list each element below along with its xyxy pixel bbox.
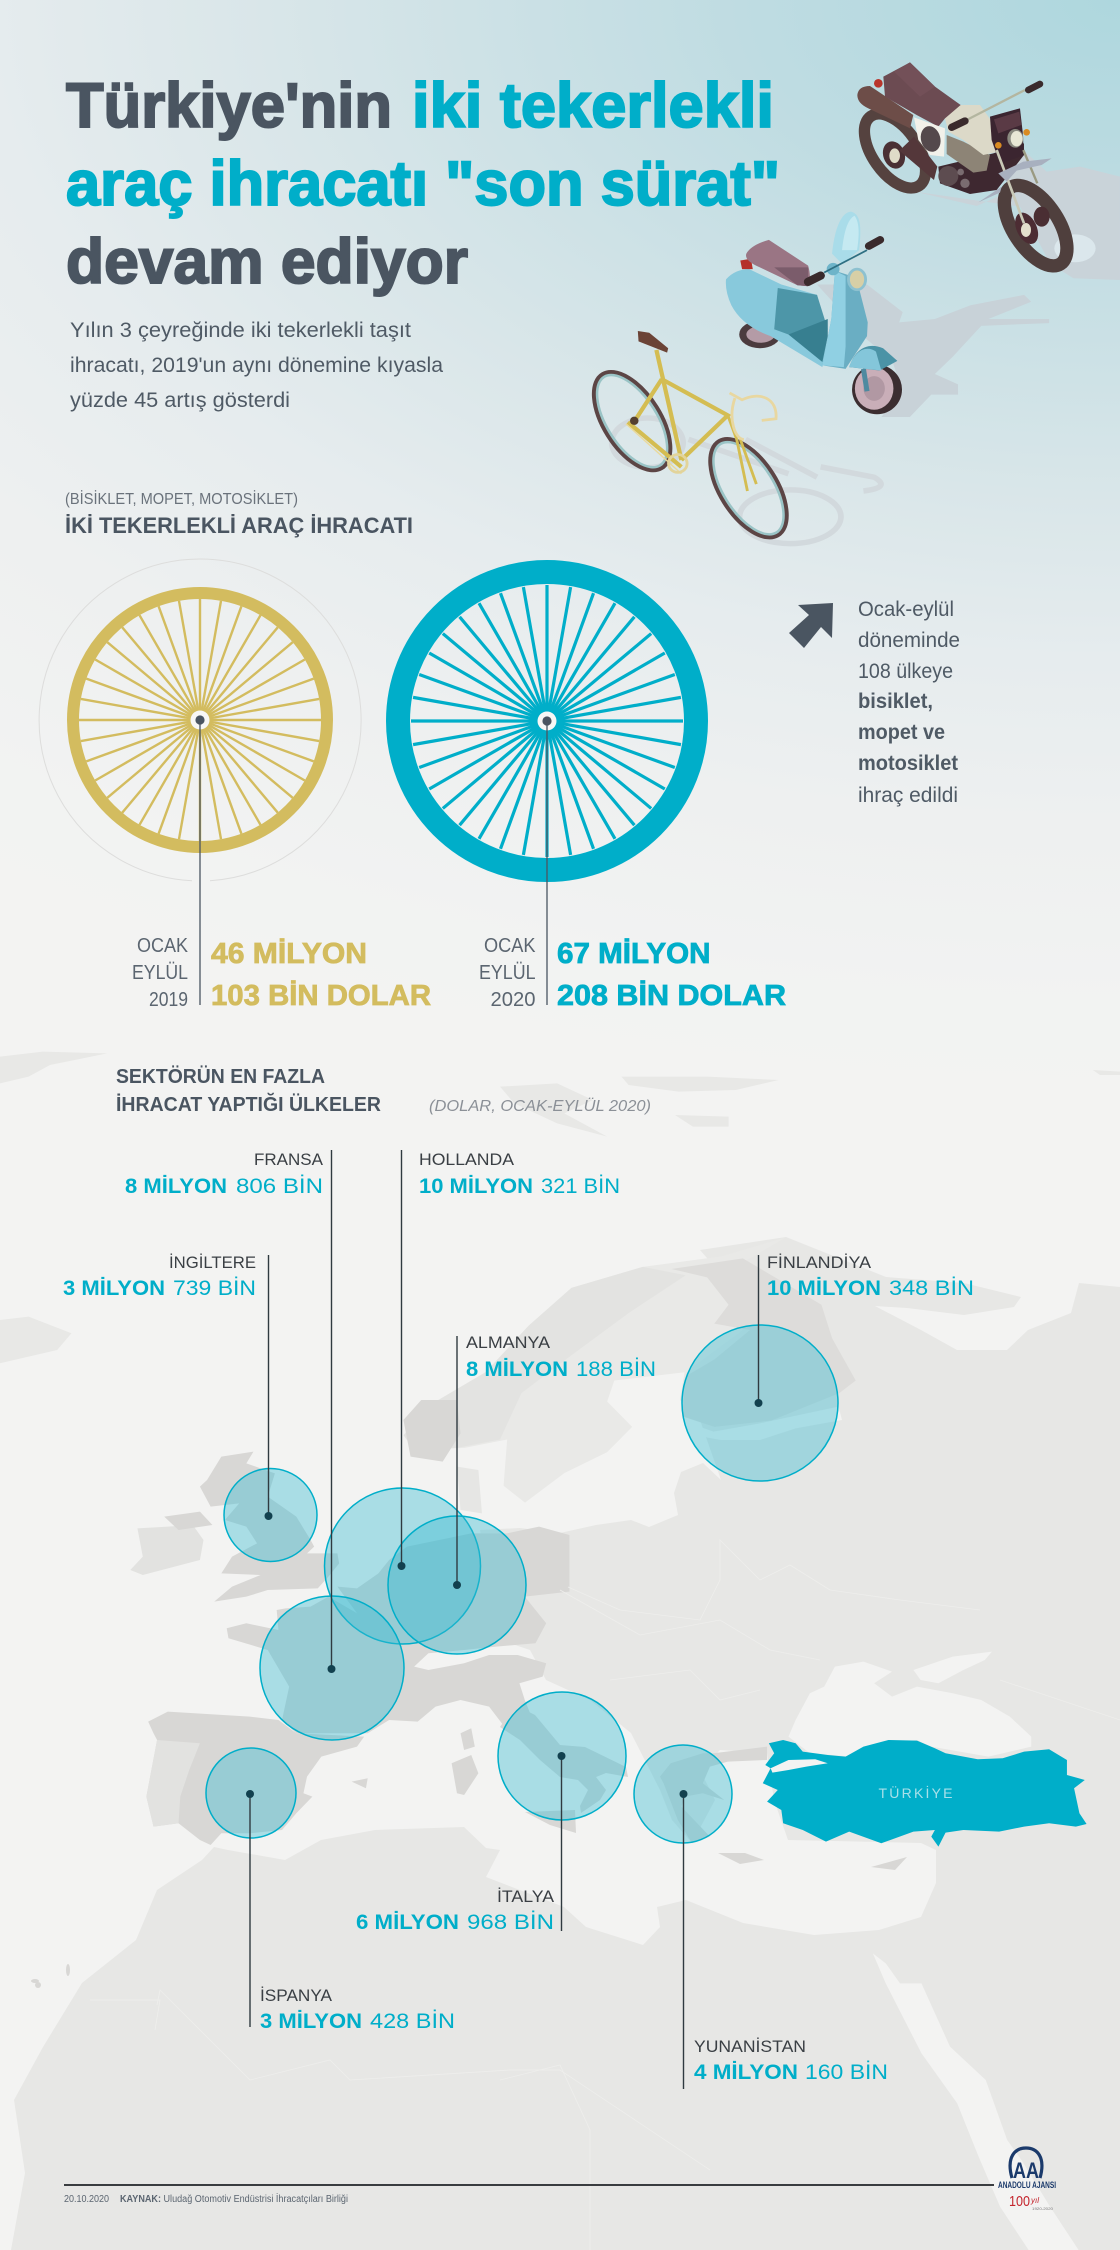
label: Finland [767,1253,974,1300]
heading: top export countries: İHRACAT YAPTIĞI ÜLKELER [116,1092,382,1116]
bicycle shadow [612,418,881,544]
label: Finland: FİNLANDİYA [767,1253,872,1272]
callout: 108 countries: mopet ve [858,721,945,744]
label: Italy: 968 BİN [467,1911,554,1934]
label: 2019 period: 2019 [149,989,188,1011]
logo: Anadolu Ajansı: AA [1013,2158,1039,2183]
label: Germany: 8 MİLYON [466,1358,568,1381]
source line: 20.10.2020 [64,2194,109,2205]
label: 2020 period: EYLÜL [479,962,536,984]
bicycle [578,331,802,550]
callout: 108 countries: Ocak-eylül [858,598,954,621]
label: 2019 period [132,935,189,1011]
callout: 108 countries: motosiklet [858,752,958,775]
section heading: export: İKİ TEKERLEKLİ ARAÇ İHRACATI [65,513,413,538]
label: Italy: 6 MİLYON [356,1911,459,1934]
label: Germany: ALMANYA [466,1333,551,1352]
country circles [206,1325,838,1843]
label: Netherlands [419,1150,620,1198]
section heading: export: (BİSİKLET, MOPET, MOTOSİKLET) [65,489,298,508]
scooter [726,212,902,414]
value: 2020: 208 BİN DOLAR [557,980,786,1012]
label: Spain: İSPANYA [260,1986,333,2005]
label: United Kingdom: 3 MİLYON [63,1277,165,1300]
callout: 108 countries [858,598,960,807]
value: 2019 [211,938,431,1012]
callout: 108 countries: 108 ülkeye [858,660,953,683]
subtitle: Yılın 3 çeyreğinde iki tekerlekli taşıt [70,319,411,342]
value: 2020 [557,938,786,1012]
land: Italy [500,1705,628,1813]
label: Netherlands: 321 BİN [541,1175,620,1198]
land: dark western Europe [130,1400,569,1845]
land: Arctic islands and Iceland [0,1052,1120,1363]
callout: 108 countries: ihraç edildi [858,784,958,807]
note: unit and period: (DOLAR, OCAK-EYLÜL 2020) [429,1097,651,1115]
label: France: 8 MİLYON [125,1175,227,1198]
label: Spain: 428 BİN [370,2010,455,2033]
label: Spain: 3 MİLYON [260,2010,362,2033]
label: United Kingdom: 739 BİN [173,1277,256,1300]
land: Corsica, Sardinia, Balearic islands [461,1728,475,1750]
label: Netherlands: 10 MİLYON [419,1175,533,1198]
label: 2020 period [479,935,536,1011]
label: Italy: İTALYA [497,1887,555,1906]
label: France [125,1150,324,1198]
land: Spain [146,1712,364,1845]
motorcycle [852,62,1120,280]
label: France: FRANSA [254,1150,324,1169]
land: Britain [200,1452,339,1602]
label: 2020 period: 2020 [490,989,536,1011]
section heading: export [65,489,413,538]
sea: Black Sea, Azov and Gulf of Finland [685,1407,1031,1757]
subtitle: yüzde 45 artış gösterdi [70,389,290,412]
title: iki tekerlekli [412,71,774,141]
land: Crete and Cyprus [31,1853,907,1988]
land: borders [90,1540,1120,2250]
logo: Anadolu Ajansı: 100 [1009,2193,1030,2210]
subtitle [70,319,443,412]
title: araç ihracatı "son sürat" [66,149,780,219]
heading: top export countries [116,1065,382,1116]
callout: 108 countries: bisiklet, [858,690,933,713]
label: Finland: 10 MİLYON [767,1277,881,1300]
heading: top export countries: SEKTÖRÜN EN FAZLA [116,1065,325,1088]
label: Germany: 188 BİN [576,1358,656,1381]
title [66,71,780,297]
label: Netherlands: HOLLANDA [419,1150,515,1169]
title: Türkiye'nin [66,71,392,141]
logo: Anadolu Ajansı [998,2148,1056,2211]
label: Finland: 348 BİN [889,1277,974,1300]
footer rule [64,2184,994,2186]
label: Greece [694,2037,888,2084]
label: United Kingdom: İNGİLTERE [169,1253,256,1272]
subtitle: ihracatı, 2019'un aynı dönemine kıyasla [70,354,443,377]
source line [64,2192,348,2205]
chart: 2019 wheel [39,559,361,1005]
label: Greece: 160 BİN [805,2061,888,2084]
label: Spain [260,1986,455,2033]
map of Europe and surroundings [0,1052,1120,2250]
vehicle shadows [817,285,1049,417]
value: 2020: 67 MİLYON [557,938,710,970]
land: Greece and Thrace [660,1747,767,1843]
leader lines and dots [246,1150,762,2089]
land: Germany and Benelux [337,1527,569,1667]
callout: 108 countries: döneminde [858,629,960,652]
logo: Anadolu Ajansı: ANADOLU AJANSI [998,2180,1056,2191]
map: Turkey: TÜRKİYE [878,1784,952,1801]
land: Scandinavia [404,1237,856,1503]
map: Turkey [763,1740,1087,1847]
label: 2020 period: OCAK [484,935,536,957]
label: 2019 period: OCAK [137,935,189,957]
label: Italy [356,1887,555,1934]
logo: Anadolu Ajansı: 1920-2020 [1032,2206,1054,2211]
land: Eurasia and Africa [11,1237,1120,2250]
label: Greece: 4 MİLYON [694,2061,798,2084]
logo: Anadolu Ajansı: yıl [1030,2196,1039,2205]
label: Germany [466,1333,656,1381]
land: France and northern Italy [227,1597,546,1733]
source line: KAYNAK: Uludağ Otomotiv Endüstrisi İhracatçıları Birliği [120,2192,348,2205]
title: devam ediyor [66,227,468,297]
sea: Red Sea [873,1953,1079,2250]
icon: bicycle, scooter and motorcycle [578,62,1120,550]
value: 2019: 103 BİN DOLAR [211,980,431,1012]
label: 2019 period: EYLÜL [132,962,188,984]
chart: 2020 wheel [398,572,696,1005]
value: 2019: 46 MİLYON [211,938,367,970]
label: United Kingdom [63,1253,256,1300]
label: France: 806 BİN [236,1175,323,1198]
label: Greece: YUNANİSTAN [694,2037,806,2056]
icon: up-right arrow [789,603,833,648]
